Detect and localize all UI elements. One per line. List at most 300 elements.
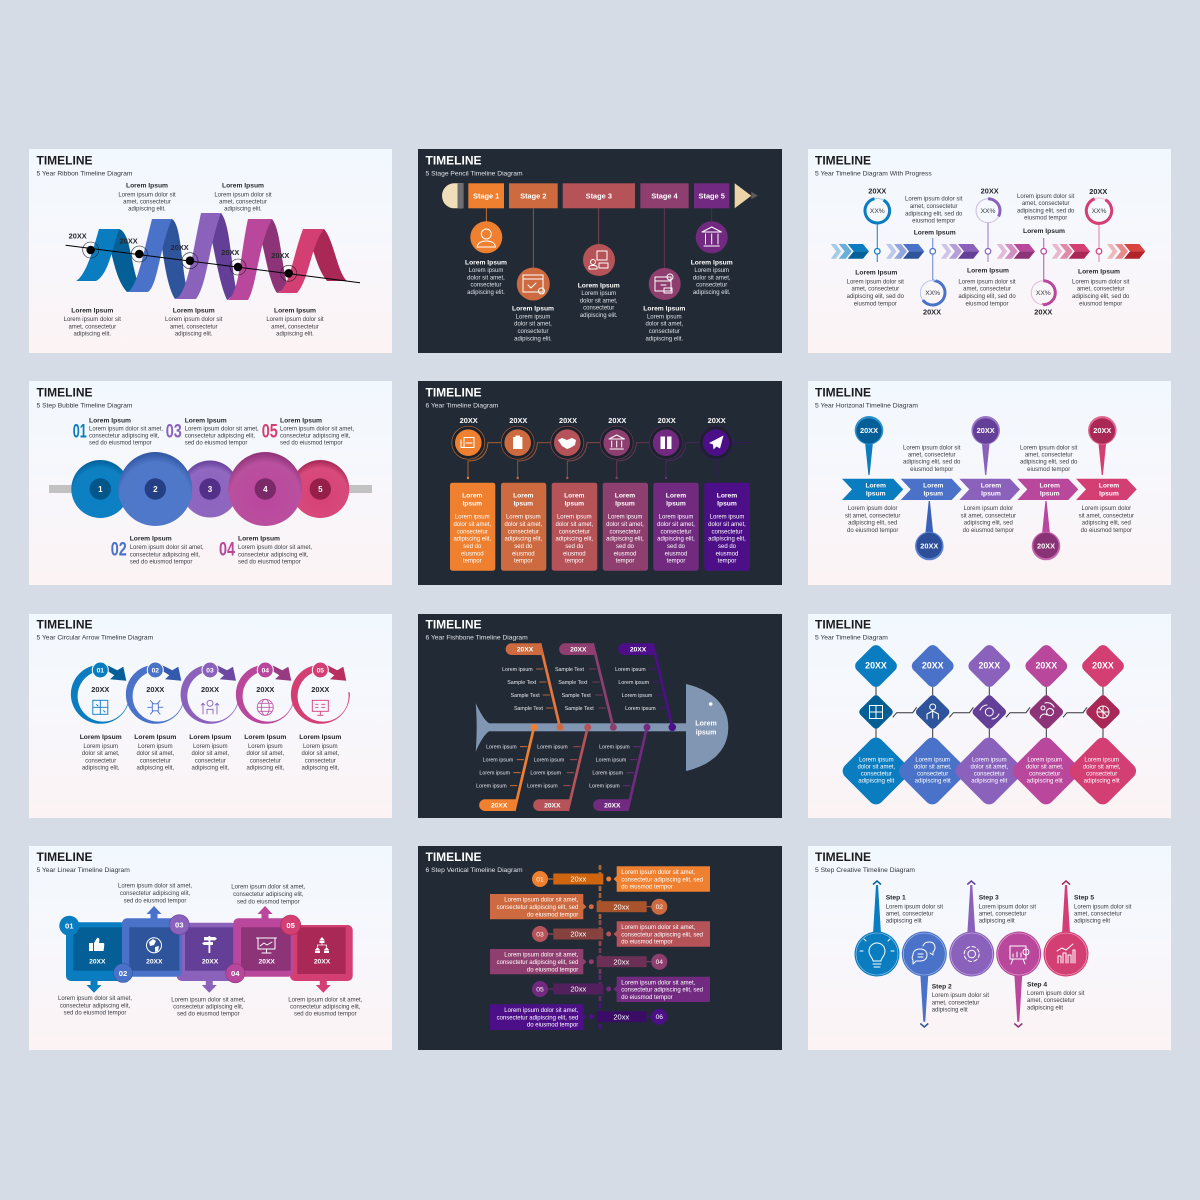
title: TIMELINE (426, 850, 482, 864)
text blocks: Lorem Ipsum (173, 307, 215, 314)
bottom diamonds with text: Lorem ipsum (972, 757, 1007, 763)
text blocks: dolor sit amet, (82, 751, 120, 757)
row 03: consectetur adipiscing elit, sed (621, 932, 703, 938)
step texts: Lorem ipsum dolor sit (1074, 904, 1132, 910)
cards: sed do (514, 544, 533, 550)
text blocks: adipiscing elit, (136, 766, 174, 772)
bottom diamonds with text: Lorem ipsum (1027, 757, 1062, 763)
icon: people and documents (583, 244, 615, 276)
row 05: consectetur adipiscing elit, sed (621, 988, 703, 994)
year labels: 20XX (171, 243, 189, 252)
bottom diamonds with text: adipiscing elit (858, 779, 895, 785)
text blocks: eiusmod tempor (912, 218, 955, 224)
rib labels: Sample Text (555, 667, 585, 673)
subtitle: 5 Year Timeline Diagram (815, 635, 888, 642)
panel: linear timeline (29, 846, 392, 1050)
text blocks (465, 259, 733, 342)
circular arrow 2: 20XX (146, 685, 164, 694)
number badges: 04 (231, 969, 240, 978)
text blocks: adipiscing elit. (128, 206, 166, 212)
pin 1 (855, 416, 883, 475)
bottom diamonds with text: consectetur (861, 772, 892, 778)
bar behind bubbles (49, 485, 372, 493)
row 06: 06 (656, 1014, 663, 1021)
text blocks: adipiscing elit. (693, 290, 731, 296)
text blocks: eiusmod tempor (910, 467, 953, 473)
step texts: consectetur adipiscing elit, (185, 433, 255, 439)
text blocks: dolor sit amet, (580, 298, 618, 304)
cards: Ipsum (564, 501, 584, 508)
text blocks: dolor sit amet, (467, 275, 505, 281)
circular arrow 4: 04 (262, 667, 269, 674)
subtitle: 5 Year Ribbon Timeline Diagram (36, 170, 133, 177)
ribbon spiral (76, 213, 347, 300)
circular arrow 1: 20XX (91, 685, 109, 694)
cards: tempor (718, 559, 736, 565)
cards: Lorem ipsum (506, 515, 541, 521)
text blocks: consectetur (195, 758, 226, 764)
bottom diamonds with text: dolor sit amet, (914, 764, 952, 770)
text blocks: sed do eiusmod tempor (177, 1012, 240, 1018)
row 06: Lorem ipsum dolor sit amet, (504, 1008, 579, 1014)
text blocks: adipiscing elit, sed (964, 521, 1013, 527)
step blocks (66, 906, 353, 993)
rib labels: Lorem ipsum (596, 758, 627, 764)
row 04: do eiusmod tempor (527, 967, 578, 973)
step texts: sed do eiusmod tempor (185, 441, 247, 447)
number badges (59, 915, 301, 983)
step texts: Step 4 (1027, 982, 1047, 989)
text blocks: Lorem Ipsum (914, 229, 956, 236)
bottom diamonds with text: dolor sit amet, (1026, 764, 1064, 770)
cards: adipiscing elit, (555, 537, 593, 543)
bottom diamonds with text: consectetur (974, 772, 1005, 778)
title: TIMELINE (815, 385, 871, 399)
rib labels: Lorem ipsum (622, 693, 653, 699)
cards: dolor sit amet, (657, 522, 695, 528)
bubbles: 4 (263, 485, 268, 494)
row 02: consectetur adipiscing elit, sed (497, 905, 578, 911)
panel: six year timeline (418, 381, 782, 585)
row 02: do eiusmod tempor (527, 912, 578, 918)
top diamonds: 20XX (978, 660, 1000, 670)
year labels: 20XX (658, 416, 676, 425)
text blocks: Lorem ipsum dolor sit (905, 197, 963, 203)
arrow band: Ipsum (1099, 491, 1119, 498)
cards: Lorem (615, 493, 635, 500)
text blocks: amet, consectetur (123, 199, 171, 205)
cards: Ipsum (717, 501, 737, 508)
row 01: Lorem ipsum dolor sit amet, (621, 870, 696, 876)
step texts: Step 5 (1074, 895, 1094, 902)
step texts: Lorem Ipsum (89, 417, 131, 424)
number badges: 03 (175, 920, 184, 930)
progress ring 4 (1031, 281, 1055, 305)
row 02 (490, 894, 667, 919)
rib labels: Lorem ipsum (618, 680, 650, 686)
cards: tempor (565, 559, 584, 565)
text blocks: adipiscing elit. (645, 336, 683, 342)
year pills: 20XX (604, 802, 621, 810)
arrow band: Ipsum (866, 491, 886, 498)
title: TIMELINE (36, 618, 92, 632)
text blocks: adipiscing elit, sed (1082, 521, 1131, 527)
text blocks: consectetur (250, 758, 281, 764)
cards: tempor (616, 559, 634, 565)
year labels: 20XX (221, 248, 239, 257)
year labels (89, 959, 331, 966)
panel: vertical timeline (418, 846, 782, 1050)
central dashed spine (599, 865, 601, 1030)
step texts: consectetur adipiscing elit, (280, 433, 351, 439)
step texts: sed do eiusmod tempor (130, 560, 192, 566)
rib labels: Sample Text (511, 693, 540, 699)
text blocks: adipiscing elit, (246, 766, 284, 772)
text blocks: Lorem Ipsum (578, 282, 620, 289)
cards: dolor sit amet, (555, 522, 593, 528)
fish skeleton (476, 684, 728, 771)
row 04: 20xx (613, 957, 629, 966)
cards: Lorem ipsum (557, 515, 592, 521)
step texts: Step 1 (886, 895, 906, 902)
text blocks: Lorem ipsum dolor (848, 506, 898, 512)
bottom diamonds with text: dolor sit amet, (1083, 764, 1121, 770)
number badges: 02 (119, 969, 127, 978)
pin 4 (1032, 501, 1060, 560)
year labels (69, 232, 289, 260)
progress ring 1 (860, 194, 894, 228)
text blocks: consectetur (140, 758, 171, 764)
cards: dolor sit amet, (453, 522, 491, 528)
panel: diamond timeline (808, 614, 1171, 818)
cards: consectetur (559, 529, 590, 535)
progress ring 2 (918, 278, 947, 307)
text blocks: sed do eiusmod tempor (294, 1012, 357, 1018)
cards: Lorem ipsum (710, 515, 744, 521)
text blocks: eiusmod tempor (854, 301, 897, 307)
cards: Ipsum (462, 501, 482, 508)
spikes with chevrons (873, 881, 1070, 1027)
panel: pencil timeline (418, 149, 782, 353)
cards: eiusmod (461, 551, 484, 557)
step texts: consectetur adipiscing elit, (89, 433, 160, 439)
text blocks: Lorem ipsum dolor sit (118, 192, 176, 198)
text blocks: Lorem ipsum dolor sit (847, 280, 904, 286)
text blocks: amet, consectetur (1025, 453, 1073, 459)
pin 5: 20XX (1093, 426, 1111, 435)
circular arrow 5: 05 (317, 667, 324, 674)
bottom diamonds with text: consectetur (1029, 772, 1060, 778)
rib labels: Lorem ipsum (615, 667, 646, 673)
year pills (479, 643, 656, 811)
timeline line with markers (66, 242, 360, 283)
year labels: 20XX (460, 416, 478, 425)
rib labels: Lorem ipsum (486, 745, 517, 751)
text blocks: Lorem ipsum dolor sit (266, 317, 324, 323)
subtitle: 5 Step Creative Timeline Diagram (815, 867, 915, 874)
text blocks: amet, consectetur (851, 287, 899, 293)
circular arrow 5: 20XX (311, 685, 329, 694)
text blocks: Lorem Ipsum (967, 267, 1009, 274)
cards: consectetur (508, 529, 539, 535)
title: TIMELINE (815, 153, 871, 167)
rib labels: Lorem ipsum (537, 745, 568, 751)
text blocks: dolor sit amet, (191, 751, 229, 757)
subtitle: 6 Step Vertical Timeline Diagram (426, 867, 523, 874)
step texts: adipiscing elit (886, 919, 922, 925)
rib labels: Lorem ipsum (483, 758, 514, 764)
step texts: sed do eiusmod tempor (280, 441, 343, 447)
top diamonds: 20XX (865, 660, 887, 670)
pencil bar: Stage 4 (651, 192, 679, 200)
text blocks: adipiscing elit. (467, 290, 505, 296)
circular arrow 4: 20XX (256, 685, 274, 694)
text blocks: Lorem Ipsum (80, 734, 122, 741)
rib labels (476, 667, 656, 790)
step circle 1: light bulb (854, 932, 900, 976)
arrow band: Lorem (1039, 483, 1060, 490)
year labels: 20XX (259, 959, 275, 966)
top diamonds: 20XX (922, 660, 944, 670)
ring values: XX% (1092, 208, 1106, 215)
circular arrow 2: 02 (152, 667, 159, 674)
text blocks: consectetur (517, 329, 549, 335)
row 02: Lorem ipsum dolor sit amet, (504, 898, 579, 904)
text blocks: Lorem ipsum dolor (1081, 506, 1131, 512)
bubbles: 5 (318, 485, 323, 494)
fish skeleton: ipsum (696, 729, 716, 736)
year labels: 20XX (559, 416, 577, 425)
step texts: Lorem Ipsum (185, 417, 227, 424)
text blocks: amet, consectetur (170, 324, 218, 330)
text blocks: adipiscing elit, sed do (905, 211, 963, 217)
arrow band: Lorem (865, 483, 886, 490)
text blocks: Lorem ipsum dolor sit (64, 317, 121, 323)
row 01: 20xx (570, 875, 586, 884)
text blocks: amet, consectetur (1022, 201, 1070, 207)
cards: tempor (667, 559, 685, 565)
step texts: sed do eiusmod tempor (89, 441, 152, 447)
cards: sed do (718, 544, 737, 550)
row 05: do eiusmod tempor (621, 995, 673, 1001)
icon node 5 (650, 426, 682, 459)
bottom diamonds with text: dolor sit amet, (970, 764, 1008, 770)
cards: consectetur (660, 529, 692, 535)
text blocks: Lorem Ipsum (126, 183, 168, 190)
text blocks: adipiscing elit. (73, 331, 111, 337)
text blocks: Lorem Ipsum (465, 259, 507, 266)
pin 3 (971, 416, 1000, 475)
text blocks: Lorem ipsum (303, 744, 338, 750)
rib labels: Lorem ipsum (530, 771, 562, 777)
cards: Lorem (564, 493, 585, 500)
cards: sed do (667, 544, 686, 550)
bottom diamonds with text (839, 734, 1139, 808)
text blocks: adipiscing elit, (82, 766, 120, 772)
text blocks: do eiusmod tempor (963, 528, 1014, 534)
icon node 6 (700, 426, 732, 459)
title: TIMELINE (36, 850, 92, 864)
title: TIMELINE (426, 385, 482, 399)
text blocks: Lorem Ipsum (855, 269, 897, 276)
text blocks (847, 194, 1130, 307)
row 05 (532, 977, 710, 1002)
ring values: 20XX (1089, 187, 1107, 196)
title: TIMELINE (426, 153, 482, 167)
text blocks: adipiscing elit. (580, 313, 618, 319)
text blocks (845, 445, 1134, 534)
panel: ribbon timeline (29, 149, 392, 353)
step texts: 05 (262, 421, 278, 442)
text blocks: Lorem Ipsum (643, 306, 685, 313)
step texts: Lorem ipsum dolor sit (932, 993, 989, 999)
row 03: 03 (536, 931, 544, 938)
text blocks: Lorem Ipsum (189, 734, 231, 741)
text blocks: consectetur (305, 758, 336, 764)
middle icon diamonds (858, 694, 1121, 730)
cards: dolor sit amet, (708, 522, 746, 528)
step texts: Step 3 (979, 895, 999, 902)
step texts: Step 2 (932, 983, 952, 990)
title: TIMELINE (36, 385, 92, 399)
cards: consectetur (711, 529, 743, 535)
step circle 5: growth chart (1044, 932, 1088, 976)
circular arrow 2 (126, 662, 185, 724)
panel: bubble timeline (29, 381, 392, 585)
text blocks: consectetur adipiscing elit, (233, 892, 304, 898)
connectors (467, 443, 750, 479)
cards: dolor sit amet, (606, 522, 644, 528)
text blocks: amet, consectetur (68, 324, 116, 330)
year labels: 20XX (120, 236, 138, 246)
rib labels: Lorem ipsum (625, 706, 656, 712)
step texts: Lorem Ipsum (238, 536, 280, 543)
cards: sed do (616, 544, 635, 550)
panel: progress timeline (808, 149, 1171, 353)
step texts: sed do eiusmod tempor (238, 560, 301, 566)
circular arrow 3: 20XX (201, 685, 219, 694)
text blocks: Lorem Ipsum (512, 306, 554, 313)
text blocks (80, 734, 341, 772)
bubbles (71, 452, 349, 526)
year labels: 20XX (69, 232, 87, 240)
rib labels: Lorem ipsum (502, 667, 533, 673)
icon: hierarchy (315, 937, 329, 953)
text blocks: Lorem ipsum dolor sit (1017, 194, 1075, 200)
step texts: amet, consectetur (886, 911, 933, 917)
text blocks: eiusmod tempor (1079, 301, 1122, 307)
text blocks: amet, consectetur (219, 199, 267, 205)
text blocks: do eiusmod tempor (1081, 528, 1132, 534)
icon: calendar (517, 268, 550, 300)
step texts: consectetur adipiscing elit, (238, 552, 309, 558)
subtitle: 5 Step Bubble Timeline Diagram (36, 402, 133, 409)
icon: presentation board (256, 938, 276, 953)
text blocks: adipiscing elit, sed (848, 521, 897, 527)
step circle 4: chart board (996, 932, 1041, 976)
text blocks: Lorem ipsum dolor sit amet, (288, 997, 363, 1003)
cards: Lorem ipsum (608, 515, 642, 521)
rib labels: Sample Text (514, 706, 544, 712)
bones (514, 643, 672, 811)
step texts: adipiscing elit (932, 1008, 968, 1014)
year labels: 20XX (89, 959, 106, 966)
row 04 (490, 949, 667, 974)
pin 2: 20XX (920, 541, 938, 550)
number badges: 01 (65, 922, 74, 930)
text blocks: Lorem ipsum dolor sit (903, 445, 961, 451)
text blocks: consectetur adipiscing elit, (120, 891, 191, 897)
icon: bank (696, 221, 728, 253)
row 06 (490, 1004, 667, 1030)
text blocks (64, 183, 324, 337)
bottom diamonds with text: consectetur (917, 772, 948, 778)
step texts: amet, consectetur (932, 1000, 979, 1006)
text blocks: Lorem Ipsum (691, 259, 733, 266)
text blocks: eiusmod tempor (1027, 467, 1070, 473)
arrow band: Lorem (923, 483, 944, 490)
row 03: Lorem ipsum dolor sit amet, (621, 925, 696, 931)
cards: Ipsum (513, 501, 533, 508)
ring values: XX% (925, 290, 940, 297)
circular arrow 3 (181, 662, 240, 724)
circular arrow 5 (291, 662, 350, 724)
ring values (868, 186, 1107, 317)
progress ring 3 (976, 199, 1000, 223)
text blocks: adipiscing elit, (191, 766, 229, 772)
text blocks: do eiusmod tempor (847, 528, 898, 534)
text blocks: Lorem Ipsum (299, 734, 341, 741)
cards: Ipsum (615, 501, 635, 508)
pencil bar: Stage 5 (699, 192, 725, 200)
row 06: 20xx (613, 1012, 629, 1021)
step texts: Lorem ipsum dolor sit (979, 904, 1036, 910)
step texts: Lorem ipsum dolor sit amet, (280, 426, 354, 432)
text blocks: amet, consectetur (1077, 287, 1125, 293)
title: TIMELINE (426, 618, 482, 632)
icon node 3 (551, 426, 584, 459)
text blocks: Lorem ipsum dolor sit (1020, 445, 1078, 451)
text blocks: Lorem ipsum dolor sit (214, 192, 272, 198)
step texts: amet, consectetur (1027, 998, 1075, 1004)
text blocks: Lorem ipsum dolor sit (958, 280, 1016, 286)
step circle 3: gear (949, 932, 994, 976)
bubbles: 1 (98, 485, 103, 494)
rib labels: Lorem ipsum (599, 745, 630, 751)
text blocks: adipiscing elit, sed do (1020, 460, 1078, 466)
stems and nodes (874, 222, 1102, 280)
spine nodes (530, 724, 676, 731)
step texts: 02 (111, 540, 127, 561)
cards: Lorem (666, 493, 686, 500)
row 01: do eiusmod tempor (621, 885, 673, 891)
row 06: do eiusmod tempor (527, 1023, 578, 1029)
text blocks: amet, consectetur (963, 287, 1011, 293)
ring values: XX% (1036, 290, 1051, 297)
text blocks: consectetur adipiscing elit, (173, 1004, 244, 1010)
rib labels: Lorem ipsum (527, 784, 558, 790)
title: TIMELINE (815, 850, 871, 864)
year labels: 20XX (314, 959, 331, 966)
text blocks: Lorem ipsum dolor (963, 506, 1013, 512)
title: TIMELINE (36, 153, 92, 167)
text blocks: Lorem Ipsum (244, 734, 286, 741)
year labels: 20XX (271, 251, 289, 260)
year pills: 20XX (630, 646, 647, 653)
year pills: 20XX (544, 802, 561, 810)
text blocks: Lorem Ipsum (274, 307, 316, 314)
text blocks: sed do eiusmod tempor (124, 898, 186, 904)
